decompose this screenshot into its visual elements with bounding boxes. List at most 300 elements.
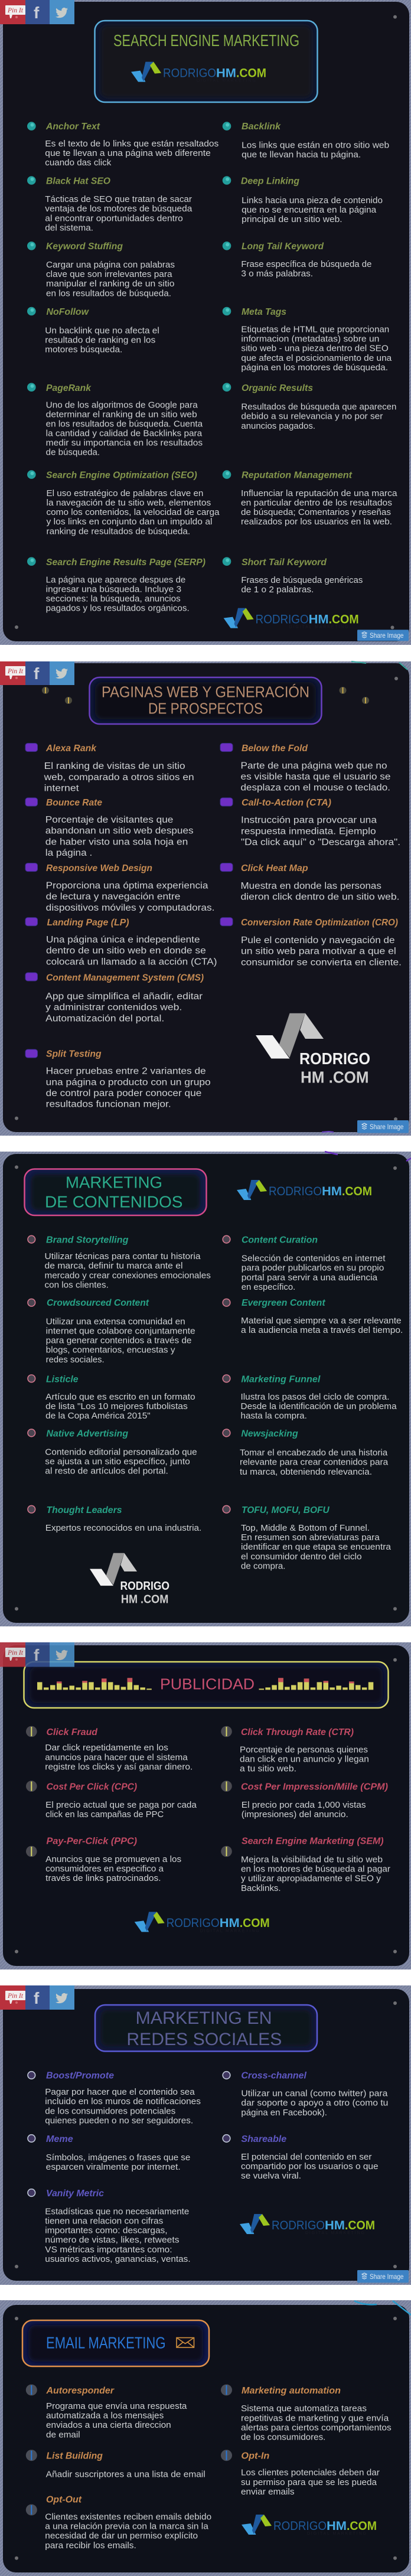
term: Organic Results: Resultados de búsqueda que aparecen <box>241 403 396 412</box>
term: Reputation Management: en particular dentro de los resultados <box>241 498 392 508</box>
term: TOFU, MOFU, BOFU: de compra. <box>241 1561 286 1571</box>
term: Short Tail Keyword: Short Tail Keyword <box>242 557 327 568</box>
term: Click Through Rate (CTR): dan click en un anuncio y llegan <box>240 1755 369 1765</box>
term: Marketing automation <box>221 2385 392 2443</box>
term: PageRank: medir su importancia en los resultados <box>46 439 203 448</box>
term: Thought Leaders: Expertos reconocidos en una industria. <box>45 1524 201 1533</box>
term: Thought Leaders: Thought Leaders <box>46 1505 122 1515</box>
term: Bounce Rate: Bounce Rate <box>46 798 102 808</box>
term: Long Tail Keyword: 3 o más palabras. <box>241 269 313 279</box>
term: Click Through Rate (CTR): Porcentaje de personas quienes <box>240 1746 368 1755</box>
term: Boost/Promote: Boost/Promote <box>46 2070 114 2081</box>
social buttons: Pin It <box>7 1991 24 2000</box>
term: Bounce Rate: la página . <box>45 848 92 858</box>
white logo: RODRIGO <box>299 1049 370 1068</box>
term: Split Testing: resultados funcionan mejor. <box>46 1100 171 1110</box>
logo: RODRIGO <box>272 2218 325 2232</box>
title box <box>22 2320 209 2366</box>
social buttons <box>0 661 74 685</box>
term: Search Engine Results Page (SERP): pagados y los resultados orgánicos. <box>46 604 190 614</box>
term: Content Management System (CMS): App que simplifica el añadir, editar <box>45 992 203 1002</box>
social buttons: Pin It <box>7 667 24 675</box>
term: Meme: Símbolos, imágenes o frases que se <box>46 2153 190 2163</box>
term: Newsjacking: tu marca, obteniendo relevancia. <box>240 1468 372 1477</box>
term: Search Engine Marketing (SEM): Backlinks. <box>241 1884 281 1893</box>
term: Listicle: de lista "Los 10 mejores futbolistas <box>45 1402 188 1411</box>
term: Marketing automation: Sistema que automatiza tareas <box>241 2404 367 2414</box>
term: Autoresponder <box>26 2385 187 2440</box>
social buttons: f <box>34 4 40 22</box>
white logo: HM .COM <box>301 1068 368 1087</box>
title box <box>25 1169 207 1215</box>
term: Shareable: El potencial del contenido en ser <box>241 2153 372 2162</box>
term: Shareable <box>223 2134 379 2181</box>
term: Marketing Funnel: hasta la compra. <box>241 1411 307 1421</box>
term: Landing Page (LP) <box>25 918 217 967</box>
term: Cross-channel: página en Facebook). <box>241 2108 327 2118</box>
term: Anchor Text: cuando das click <box>45 158 112 168</box>
term: Backlink: Los links que están en otro sitio web <box>242 141 389 150</box>
term: Cross-channel: Utilizar un canal (como twitter) para <box>241 2089 388 2099</box>
term: Landing Page (LP): dentro de un sitio web en donde se <box>46 946 206 956</box>
term: Native Advertising: se ajusta a un sitio específico, junto <box>45 1457 190 1467</box>
term: Anchor Text <box>27 122 218 168</box>
term: Boost/Promote: incluido en los muros de notificaciones <box>45 2097 201 2107</box>
term: Responsive Web Design: Proporciona una óptima experiencia <box>46 881 208 891</box>
equalizer left <box>37 1678 152 1690</box>
term: Keyword Stuffing: en los resultados de búsqueda. <box>46 289 171 299</box>
term: Newsjacking: relevante para crear contenidos para <box>240 1457 389 1467</box>
term: Search Engine Results Page (SERP) <box>27 557 206 614</box>
title text: PAGINAS WEB Y GENERACIÓN <box>102 683 309 701</box>
term: Shareable: se vuelva viral. <box>241 2171 301 2181</box>
term: Search Engine Optimization (SEO): la navegación de tu sitio web, elementos <box>46 498 211 508</box>
term: Cross-channel: Cross-channel <box>241 2070 306 2081</box>
term: Reputation Management: realizados por los usuarios en la web. <box>241 517 392 527</box>
term: Click Fraud: Click Fraud <box>46 1727 98 1737</box>
term: Opt-Out: para recibir los emails. <box>45 2541 136 2551</box>
social buttons <box>0 1642 74 1667</box>
decorative gold dots <box>42 687 369 704</box>
term: List Building <box>26 2450 206 2479</box>
term: Pay-Per-Click (PPC): Anuncios que se promueven a los <box>45 1855 181 1864</box>
term: Keyword Stuffing <box>27 242 175 299</box>
term: Long Tail Keyword: Frase específica de búsqueda de <box>241 260 371 269</box>
term: Reputation Management: de búsqueda; Comentarios y reseñas <box>241 508 391 517</box>
panel: Search Engine Marketing <box>0 0 411 645</box>
term: Short Tail Keyword: de 1 o 2 palabras. <box>241 585 314 595</box>
logo: .COM <box>240 1916 270 1930</box>
term: Cost Per Impression/Mille (CPM): (impresiones) del anuncio. <box>242 1810 348 1819</box>
term: Bounce Rate: Porcentaje de visitantes que <box>45 815 173 825</box>
term: Marketing Funnel: Desde la identificación de un problema <box>241 1402 397 1411</box>
logo: .COM <box>236 66 266 80</box>
term: Content Management System (CMS): y administrar contenidos web. <box>45 1003 182 1013</box>
term: Marketing automation: Marketing automation <box>242 2386 341 2396</box>
term: Split Testing: Hacer pruebas entre 2 variantes de <box>46 1067 206 1077</box>
title box <box>94 21 318 102</box>
icon: envelope <box>177 2337 194 2347</box>
term: Long Tail Keyword: Long Tail Keyword <box>242 242 324 252</box>
term: Organic Results: Organic Results <box>242 383 313 393</box>
term: Long Tail Keyword <box>223 242 371 279</box>
social buttons: Pin It <box>7 6 24 14</box>
term: Anchor Text: Anchor Text <box>45 122 100 132</box>
term: Listicle: Artículo que es escrito en un formato <box>45 1393 195 1402</box>
title box <box>95 2005 317 2052</box>
term: Brand Storytelling: con los clientes. <box>45 1280 109 1290</box>
term: Black Hat SEO: al encontrar oportunidades dentro <box>45 214 183 223</box>
logo: .COM <box>345 2218 375 2232</box>
term: TOFU, MOFU, BOFU: Top, Middle & Bottom of Funnel. <box>241 1524 370 1533</box>
term: Brand Storytelling <box>28 1235 211 1290</box>
term: Brand Storytelling: de marca, definir tu marca ante el <box>45 1261 183 1271</box>
term: Meme <box>28 2134 190 2172</box>
term: Crowdsourced Content: para generar contenidos a través de <box>46 1336 191 1346</box>
term: Search Engine Optimization (SEO): Search Engine Optimization (SEO) <box>46 470 197 481</box>
term: Search Engine Marketing (SEM) <box>221 1836 390 1893</box>
logo: RODRIGO <box>269 1184 322 1198</box>
term: Click Fraud: registre los clicks y así ganar dinero. <box>45 1762 193 1772</box>
term: Click Fraud: anuncios para hacer que el sistema <box>45 1753 188 1762</box>
term: Marketing Funnel <box>223 1375 397 1421</box>
term: Conversion Rate Optimization (CRO): consumidor se convierta en cliente. <box>241 957 402 967</box>
term: Call-to-Action (CTA): Call-to-Action (CTA) <box>242 798 331 808</box>
term: PageRank: en los resultados de búsqueda. Cuenta <box>46 419 203 429</box>
logo: .COM <box>347 2519 377 2533</box>
term: Search Engine Optimization (SEO): como los contenidos, la velocidad de carga <box>46 508 220 517</box>
term: Search Engine Marketing (SEM): en los motores de búsqueda al pagar <box>241 1865 390 1874</box>
share button: Share Image <box>370 1123 404 1131</box>
term: Pay-Per-Click (PPC): través de links patrocinados. <box>45 1874 161 1883</box>
title box <box>24 1662 389 1708</box>
social buttons: Pin It <box>7 1648 24 1657</box>
term: Evergreen Content <box>223 1298 403 1335</box>
term: NoFollow <box>27 307 159 354</box>
term: Marketing Funnel: Marketing Funnel <box>241 1375 321 1384</box>
term: Reputation Management: Influenciar la reputación de una marca <box>241 489 397 498</box>
term: Meta Tags: sitio web - una pieza dentro del SEO <box>241 344 389 354</box>
term: Cost Per Click (CPC) <box>26 1781 197 1819</box>
logo: HM <box>220 1916 240 1930</box>
term: Autoresponder: Autoresponder <box>46 2386 115 2396</box>
term: Alexa Rank: Alexa Rank <box>45 744 97 754</box>
term: Listicle: Listicle <box>46 1375 79 1384</box>
term: Opt-Out: Opt-Out <box>46 2495 82 2505</box>
term: Crowdsourced Content: Utilizar una extensa comunidad en <box>46 1317 185 1326</box>
term: NoFollow: NoFollow <box>46 307 90 317</box>
term: Below the Fold <box>220 744 391 793</box>
term: Alexa Rank <box>25 744 194 794</box>
term: Keyword Stuffing: manipular el ranking de un sitio <box>46 279 175 289</box>
logo: HM <box>327 2519 347 2533</box>
term: NoFollow: Un backlink que no afecta el <box>45 326 159 335</box>
term: Meme: Meme <box>46 2134 73 2144</box>
logo: RODRIGO <box>167 1916 220 1930</box>
term: Thought Leaders <box>28 1505 201 1533</box>
social buttons: f <box>34 1646 40 1664</box>
white logo: RODRIGO <box>120 1580 169 1593</box>
share button <box>357 630 409 641</box>
term: Opt-In: enviar emails <box>241 2487 294 2497</box>
term: Search Engine Marketing (SEM): Mejora la visibilidad de tu sitio web <box>241 1856 383 1865</box>
logo <box>224 608 359 630</box>
term: Boost/Promote: de los consumidores potenciales <box>45 2107 175 2116</box>
term: Search Engine Optimization (SEO): y los links en conjunto dan un impuldo al <box>46 517 213 527</box>
term: Alexa Rank: El ranking de visitas de un sitio <box>44 761 185 771</box>
logo <box>135 1912 270 1933</box>
share button <box>357 1120 409 1133</box>
term: PageRank: la cantidad y calidad de Backlinks para <box>46 429 203 439</box>
term: Organic Results: debido a su relevancia y no por ser <box>241 412 383 422</box>
term: Opt-In <box>221 2450 380 2497</box>
term: Autoresponder: Programa que envía una respuesta <box>46 2402 187 2411</box>
logo: .COM <box>329 612 359 626</box>
term: Backlink <box>223 122 389 159</box>
term: TOFU, MOFU, BOFU: el consumidor dentro del ciclo <box>241 1552 362 1561</box>
term: Meta Tags: Meta Tags <box>242 307 286 317</box>
term: Search Engine Results Page (SERP): secciones: la búsqueda, anuncios <box>46 594 181 604</box>
term: Search Engine Results Page (SERP): La página que aparece despues de <box>46 575 185 585</box>
term: Keyword Stuffing: clave que son irrelevantes para <box>46 270 172 279</box>
term: Responsive Web Design <box>25 863 215 913</box>
term: Black Hat SEO: Tácticas de SEO que tratan de sacar <box>45 195 192 204</box>
logo: HM <box>322 1184 342 1198</box>
logo: DIGITAL MARKETING <box>302 1197 361 1201</box>
term: Crowdsourced Content: Crowdsourced Content <box>47 1298 149 1308</box>
title box: REDES SOCIALES <box>126 2030 282 2049</box>
term: Newsjacking: Tomar el encabezado de una historia <box>240 1448 388 1457</box>
term: Vanity Metric: usuarios activos, ganancias, ventas. <box>45 2255 191 2264</box>
term: Brand Storytelling: Utilizar técnicas para contar tu historia <box>45 1252 201 1261</box>
panel: Marketing de contenidos <box>0 1152 411 1626</box>
logo: DIGITAL MARKETING <box>200 1929 259 1933</box>
term: Vanity Metric: Vanity Metric <box>46 2189 104 2199</box>
panel: Publicidad <box>0 1642 411 1970</box>
term: Backlink: que te llevan hacia tu página. <box>242 150 361 159</box>
title text: PUBLICIDAD <box>160 1675 255 1693</box>
term: Listicle <box>28 1375 195 1421</box>
term: Cost Per Impression/Mille (CPM): Cost Per Impression/Mille (CPM) <box>241 1782 388 1792</box>
term: TOFU, MOFU, BOFU <box>223 1505 392 1571</box>
term: PageRank: determinar el ranking de un sitio web <box>46 410 197 419</box>
term: Split Testing: una página o producto con un grupo <box>46 1077 211 1088</box>
logo: DIGITAL MARKETING <box>307 2532 366 2536</box>
term: Click Heat Map <box>220 863 399 902</box>
term: Boost/Promote: quienes pueden o no ser seguidores. <box>45 2116 193 2125</box>
term: Black Hat SEO: Black Hat SEO <box>46 176 111 187</box>
title box: DE CONTENIDOS <box>45 1192 183 1211</box>
term: NoFollow: resultado de ranking en los <box>45 335 155 345</box>
term: Marketing automation: de los consumidores. <box>241 2433 325 2443</box>
term: Marketing automation: alertas para ciertos comportamientos <box>241 2423 392 2432</box>
term: Cross-channel <box>223 2070 388 2118</box>
term: Opt-Out: Clientes existentes reciben emails debido <box>45 2512 211 2522</box>
title text: EMAIL MARKETING <box>46 2334 165 2352</box>
social buttons <box>0 0 74 24</box>
share button <box>357 2270 409 2282</box>
panel: Email Marketing <box>0 2300 411 2576</box>
term: Native Advertising <box>28 1429 197 1476</box>
term: Evergreen Content: Material que siempre va a ser relevante <box>241 1316 402 1326</box>
term: Below the Fold: Below the Fold <box>242 744 308 754</box>
term: Opt-Out <box>26 2495 211 2551</box>
term: Landing Page (LP): Landing Page (LP) <box>47 918 129 928</box>
term: Evergreen Content: a la audiencia meta a través del tiempo. <box>241 1326 403 1335</box>
term: PageRank: de búsqueda. <box>46 448 100 458</box>
term: Cost Per Click (CPC): El precio actual que se paga por cada <box>45 1801 197 1810</box>
logo <box>237 1180 372 1201</box>
term: Landing Page (LP): Una página única e independiente <box>46 935 200 945</box>
term: Boost/Promote: Pagar por hacer que el contenido sea <box>45 2088 195 2097</box>
term: TOFU, MOFU, BOFU: TOFU, MOFU, BOFU <box>242 1505 330 1515</box>
term: Deep Linking: Links hacia una pieza de contenido <box>242 196 383 206</box>
term: Search Engine Results Page (SERP): ingresar una búsqueda. Incluye 3 <box>46 585 181 594</box>
term: Conversion Rate Optimization (CRO): Pule el contenido y navegación de <box>241 935 394 945</box>
term: Vanity Metric: importantes como: descargas, <box>45 2226 168 2235</box>
term: Crowdsourced Content: blogs, comentarios, encuestas y <box>46 1346 175 1355</box>
term: Content Curation: Content Curation <box>242 1235 318 1245</box>
term: Bounce Rate <box>25 798 194 858</box>
term: Meme: esparcen viralmente por internet. <box>46 2163 181 2172</box>
term: Landing Page (LP): colocará un llamado a la acción (CTA) <box>46 957 217 967</box>
term: Click Through Rate (CTR): Click Through Rate (CTR) <box>241 1727 354 1737</box>
term: Below the Fold: Parte de una página web que no <box>241 761 387 771</box>
term: Meta Tags <box>223 307 392 373</box>
title text: SEARCH ENGINE MARKETING <box>113 31 299 50</box>
logo <box>131 62 266 83</box>
term: Evergreen Content: Evergreen Content <box>242 1298 325 1308</box>
term: Black Hat SEO <box>27 176 193 233</box>
term: Search Engine Optimization (SEO): ranking de resultados de búsqueda. <box>46 527 190 537</box>
logo: DIGITAL MARKETING <box>305 2231 364 2235</box>
term: PageRank: Uno de los algoritmos de Google para <box>46 400 198 410</box>
term: Vanity Metric <box>28 2189 191 2264</box>
term: Conversion Rate Optimization (CRO) <box>220 918 402 967</box>
term: Search Engine Marketing (SEM): Search Engine Marketing (SEM) <box>242 1836 384 1846</box>
term: Brand Storytelling: Brand Storytelling <box>46 1235 129 1245</box>
panel: Páginas web y generación de prospectos <box>0 661 411 1136</box>
term: Marketing automation: repetitivas de marketing y que envía <box>241 2414 389 2423</box>
term: Vanity Metric: VS métricas importantes como: <box>45 2245 172 2255</box>
term: Keyword Stuffing: Keyword Stuffing <box>46 242 123 252</box>
term: Call-to-Action (CTA): respuesta inmediata. Ejemplo <box>241 827 376 836</box>
term: Meta Tags: informacion (metadatas) sobre un <box>241 335 379 344</box>
term: Boost/Promote <box>28 2070 201 2125</box>
term: Opt-In: su permiso para que se les pueda <box>241 2478 377 2487</box>
logo: RODRIGO <box>273 2519 327 2533</box>
term: Newsjacking <box>223 1429 389 1477</box>
term: Content Curation: en específico. <box>242 1283 295 1292</box>
term: Pay-Per-Click (PPC): consumidores en especifico a <box>45 1864 164 1874</box>
term: Autoresponder: enviados a una cierta direccion <box>46 2421 171 2430</box>
term: Opt-Out: necesidad de dar un permiso explícito <box>45 2532 198 2541</box>
term: Autoresponder: de email <box>46 2430 80 2440</box>
term: Content Curation: para poder publicarlos en su propio <box>242 1263 384 1273</box>
term: NoFollow: motores búsqueda. <box>45 345 122 354</box>
term: Split Testing <box>25 1049 211 1110</box>
term: Click Heat Map: Muestra en donde las personas <box>241 881 381 891</box>
term: Cost Per Click (CPC): click en las campañas de PPC <box>45 1810 164 1819</box>
term: Reputation Management: Reputation Management <box>242 470 353 481</box>
social buttons: f <box>34 664 40 683</box>
title text: MARKETING EN <box>136 2008 272 2028</box>
title box <box>90 677 321 724</box>
logo: HM <box>325 2218 345 2232</box>
white logo <box>256 1013 370 1087</box>
share button: Share Image <box>370 2272 404 2281</box>
logo: DIGITAL MARKETING <box>289 625 348 630</box>
term: Meta Tags: que afecta el posicionamiento de una <box>241 354 392 363</box>
term: Anchor Text: que te llevan a una página web diferente <box>45 149 211 158</box>
term: Bounce Rate: abandonan un sitio web despues <box>45 826 194 836</box>
term: PageRank <box>27 383 203 458</box>
term: Black Hat SEO: del sistema. <box>45 224 93 233</box>
term: Click Fraud: Dar click repetidamente en los <box>45 1743 168 1753</box>
term: Black Hat SEO: ventaja de los motores de búsqueda <box>45 204 193 214</box>
term: Keyword Stuffing: Cargar una página con palabras <box>46 260 175 270</box>
term: Cross-channel: dar soporte o apoyo a otro (como tu <box>241 2099 388 2108</box>
term: Deep Linking: principal de un sitio web. <box>242 215 342 224</box>
term: Native Advertising: al resto de artículos del portal. <box>45 1467 168 1476</box>
term: Click Heat Map: dieron click dentro de un sitio web. <box>241 892 399 902</box>
title box: DE PROSPECTOS <box>148 700 263 718</box>
term: Content Curation <box>223 1235 385 1292</box>
term: Call-to-Action (CTA): "Da click aquí" o "Descarga ahora". <box>241 837 400 847</box>
white logo: HM .COM <box>121 1593 168 1606</box>
term: Crowdsourced Content <box>28 1298 195 1365</box>
social buttons: f <box>34 1989 40 2007</box>
equalizer right <box>259 1678 373 1690</box>
term: PageRank: PageRank <box>46 383 92 393</box>
term: Search Engine Marketing (SEM): y utilizar apropiadamente el SEO y <box>241 1874 381 1884</box>
term: Content Curation: Selección de contenidos en internet <box>242 1254 385 1263</box>
term: Alexa Rank: internet <box>44 783 79 794</box>
term: Deep Linking: Deep Linking <box>241 176 299 187</box>
term: Reputation Management <box>223 470 397 527</box>
term: Opt-Out: a una relación previa con la marca sin la <box>45 2522 209 2532</box>
term: Organic Results <box>223 383 396 431</box>
term: Autoresponder: automatizada a los mensajes <box>46 2411 164 2421</box>
term: Content Management System (CMS): Content Management System (CMS) <box>46 973 204 983</box>
term: Click Through Rate (CTR) <box>221 1726 369 1774</box>
term: Cost Per Click (CPC): Cost Per Click (CPC) <box>46 1782 137 1792</box>
term: Responsive Web Design: dispositivos móviles y computadoras. <box>46 903 214 913</box>
term: Cost Per Impression/Mille (CPM): El precio por cada 1,000 vistas <box>242 1801 366 1810</box>
term: TOFU, MOFU, BOFU: identificar en que etapa se encuentra <box>241 1543 392 1552</box>
share button: Share Image <box>370 631 404 640</box>
term: Click Fraud <box>26 1726 193 1772</box>
term: Anchor Text: Es el texto de lo links que están resaltados <box>45 139 218 149</box>
logo: RODRIGO <box>163 66 216 80</box>
term: Vanity Metric: tienen una relacion con cifras <box>45 2216 163 2226</box>
term: Crowdsourced Content: internet que colabore conjuntamente <box>46 1327 195 1336</box>
term: Content Management System (CMS): Automatización del portal. <box>45 1013 164 1023</box>
logo: HM <box>216 66 236 80</box>
term: Search Engine Optimization (SEO): El uso estratégico de palabras clave en <box>46 489 203 498</box>
term: TOFU, MOFU, BOFU: En resumen son abreviaturas para <box>241 1533 380 1543</box>
term: Opt-In: Los clientes potenciales deben dar <box>241 2469 380 2478</box>
term: Search Engine Optimization (SEO) <box>27 470 220 537</box>
term: Click Heat Map: Click Heat Map <box>241 863 308 873</box>
term: Shareable: compartido por los usuarios o que <box>241 2162 379 2171</box>
term: Meta Tags: Etiquetas de HTML que proporcionan <box>241 325 389 334</box>
term: Marketing Funnel: Ilustra los pasos del ciclo de compra. <box>241 1393 390 1402</box>
term: List Building: List Building <box>46 2451 103 2461</box>
term: Content Curation: portal para servir a una audiencia <box>242 1273 378 1283</box>
logo: .COM <box>342 1184 372 1198</box>
term: Native Advertising: Contenido editorial personalizado que <box>45 1448 197 1457</box>
